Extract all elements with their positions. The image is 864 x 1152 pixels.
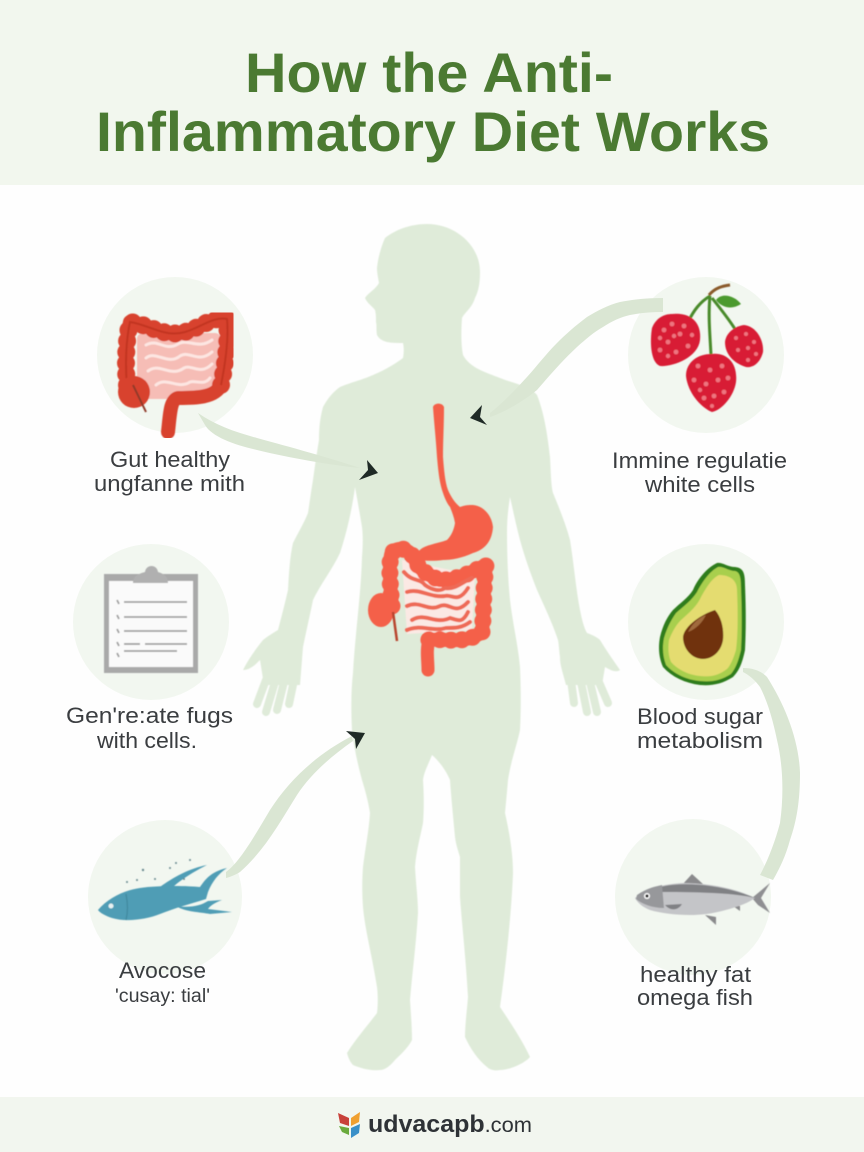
footer text: udvacapb.com: [368, 1111, 532, 1138]
berry right: [725, 325, 763, 367]
connector ribbon: avocado to grey fish: [743, 668, 800, 880]
footer band: [0, 1097, 864, 1152]
label: avocose: [115, 958, 210, 1007]
splash dots: [126, 859, 191, 883]
small intestine area: [402, 560, 475, 634]
arrowhead: blue fish connector: [346, 731, 365, 749]
hand: left fingers: [257, 680, 294, 712]
panel: clipboard: [66, 544, 233, 753]
rectum: [427, 640, 429, 670]
label: blood sugar: Blood sugar: [637, 704, 763, 729]
hand: right fingers: [571, 680, 608, 712]
label: avocose: 'cusay: tial': [115, 986, 210, 1007]
appendix: [393, 612, 397, 641]
label: avocose: Avocose: [119, 958, 206, 983]
icon: blue fish: [98, 859, 232, 920]
seeds: [658, 322, 758, 408]
label: blood sugar: [637, 704, 763, 753]
cecum: [368, 593, 394, 627]
label: immune: [612, 448, 787, 497]
stems: [688, 296, 735, 355]
human body silhouette: [243, 224, 620, 1070]
berry left: [651, 314, 700, 366]
label: generate: Gen're:ate fugs: [66, 703, 233, 728]
panel: berries: [612, 277, 787, 497]
icon: grey fish: [635, 874, 770, 925]
label: healthy fat: omega fish: [637, 985, 753, 1010]
berry bottom: [686, 354, 736, 412]
icon: logo: [338, 1112, 360, 1138]
label: healthy fat: [637, 962, 753, 1010]
avocado pit: [683, 610, 723, 659]
label: blood sugar: metabolism: [637, 728, 763, 753]
label: immune: white cells: [644, 472, 755, 497]
large intestine: [390, 549, 486, 640]
connector ribbon: gut to body: [198, 413, 360, 468]
label: generate: [66, 703, 233, 753]
panel: blue fish: [88, 820, 242, 1007]
leaf: [716, 296, 741, 307]
panel: gut: [94, 277, 253, 496]
esophagus and stomach: [417, 404, 493, 561]
label: immune: Immine regulatie: [612, 448, 787, 473]
arrowhead: berries connector: [470, 405, 487, 425]
title: [96, 41, 770, 163]
label: healthy fat: healthy fat: [640, 962, 751, 987]
connector ribbon: blue fish to body: [226, 736, 353, 878]
arrowhead: gut connector: [359, 460, 378, 480]
icon: avocado: [659, 563, 746, 685]
header band with title: [0, 0, 864, 185]
title: Inflammatory Diet Works: [96, 100, 770, 163]
icon: intestines: [118, 319, 228, 432]
label: gut: Gut healthy: [110, 447, 230, 472]
panel: avocado: [628, 544, 784, 753]
panel: grey fish: [615, 819, 771, 1010]
icon: red berries: [651, 285, 763, 412]
icon: clipboard: [104, 566, 198, 673]
connector ribbon: berries to body: [490, 298, 663, 417]
small intestine loops: [404, 572, 472, 630]
label: gut: ungfanne mith: [94, 471, 245, 496]
label: generate: with cells.: [96, 728, 197, 753]
title: How the Anti-: [245, 41, 613, 104]
digestive system in body: [368, 404, 493, 670]
label: gut: [94, 447, 245, 496]
